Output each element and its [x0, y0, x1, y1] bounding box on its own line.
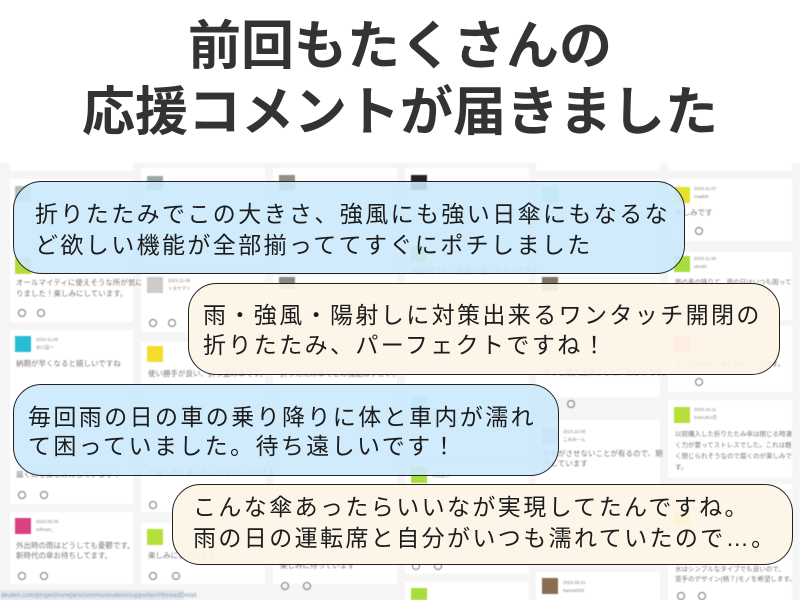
- column 5 comment cards: 雨傘がさせないことが有るので、期: [543, 448, 663, 458]
- column 2 comment cards: で届くのを楽しみにお待ちしています。: [148, 467, 282, 477]
- column 1 comment cards: 2023.11.05: [36, 337, 59, 342]
- column 1 comment cards: 届くのを楽しみにしています！: [16, 469, 121, 479]
- column 1 comment cards: [10, 160, 151, 584]
- column 5 comment cards: [536, 160, 670, 600]
- column 1 comment cards: mifreen_: [36, 527, 54, 532]
- column 2 comment cards: 2023.11.08: [168, 278, 191, 283]
- speech bubble: cream comment 4: こんな傘あったらいいなが実現してたんですね。: [193, 494, 750, 520]
- column 4 comment cards: [405, 168, 539, 600]
- column 1 comment cards: 新時代の傘お待ちしてます。: [16, 550, 112, 560]
- title: [82, 17, 718, 142]
- column 6 comment cards: く力が要ってストレスでした。これは軽: [675, 440, 792, 449]
- column 2 comment cards: 使い勝手が良い、折り畳み傘です。: [148, 368, 267, 378]
- column 6 comment cards: 2023.10.11: [694, 407, 717, 412]
- column 5 comment cards: やっと購入出来ました、楽しみです。: [543, 367, 670, 377]
- column 1 comment cards: 水川菜〜: [36, 344, 54, 351]
- column 6 comment cards: 水はシンプルなタイプでも良いので、: [675, 564, 785, 573]
- comment wall background: [0, 160, 800, 600]
- column 6 comment cards: 楽しみです: [675, 207, 712, 217]
- title: 前回もたくさんの: [188, 17, 612, 76]
- column 5 comment cards: 2023.10.08: [563, 429, 586, 434]
- browser status bar url: akuten.com/project/runejars/communication/supporter/#threadDetail: [1, 592, 197, 599]
- column 6 comment cards: す。: [675, 463, 687, 471]
- speech bubble: blue comment 3: [14, 384, 558, 476]
- column 1 comment cards: 外出時の雨はどうしても憂鬱です。: [16, 540, 135, 550]
- column 5 comment cards: 待しています: [543, 458, 588, 468]
- column 1 comment cards: 2023.06.05: [36, 519, 59, 524]
- column 6 comment cards: く閉じられそうなので届くのが楽しみで: [675, 451, 792, 460]
- column 6 comment cards: maable: [694, 194, 709, 199]
- column 6 comment cards: 2023.11.07: [694, 186, 717, 191]
- column 2 comment cards: [141, 168, 282, 584]
- column 1 comment cards: 納期が早くなると嬉しいですね: [16, 358, 121, 368]
- speech bubble: blue comment 1: ど欲しい機能が全部揃っててすぐにポチしました: [35, 232, 593, 258]
- column 5 comment cards: 2023.09.21: [563, 580, 586, 585]
- column 6 comment cards: skoshi: [694, 264, 707, 269]
- speech bubble: cream comment 2: 折りたたみ、パーフェクトですね！: [203, 332, 608, 358]
- browser status bar url: [0, 590, 197, 600]
- column 6 comment cards: 雨の奥の降りて、雨の日はいつも困って: [675, 277, 791, 286]
- column 6 comment cards: 以前購入した折りたたみ傘は閉じる時凄: [675, 429, 792, 438]
- column 1 comment cards: りました！楽しみにしています。: [16, 288, 128, 298]
- column 6 comment cards: とても実用的！楽しみにしています。: [675, 359, 784, 368]
- column 4 comment cards: 水紀起き: [432, 472, 450, 479]
- column 4 comment cards: 雨の日でも、快適に過ごせそうです！: [412, 265, 539, 275]
- column 3 comment cards: [273, 168, 400, 590]
- title: 応援コメントが届きました: [82, 83, 718, 142]
- column 3 comment cards: 楽しみに待っています: [280, 560, 355, 570]
- column 5 comment cards: こみみーん: [563, 437, 586, 443]
- speech bubble: blue comment 3: 毎回雨の日の車の乗り降りに体と車内が濡れ: [28, 404, 536, 430]
- column 6 comment cards: 2023.11.06: [694, 256, 717, 261]
- column 6 comment cards: SAKURA花: [694, 414, 718, 421]
- speech bubble: cream comment 4: 雨の日の運転席と自分がいつも濡れていたので…。: [193, 525, 777, 551]
- column 2 comment cards: 楽しみにしています。: [148, 550, 222, 560]
- speech bubble: cream comment 2: [188, 284, 780, 374]
- column 5 comment cards: haina5555: [563, 588, 585, 593]
- column 1 comment cards: オールマイティに使えそうな所が気に入: [16, 277, 151, 287]
- column 2 comment cards: トヌヤマリ: [168, 286, 190, 292]
- speech bubble: blue comment 1: 折りたたみでこの大きさ、強風にも強い日傘にもなるな: [35, 201, 670, 227]
- speech bubble: cream comment 2: 雨・強風・陽射しに対策出来るワンタッチ開閉の: [203, 302, 762, 328]
- speech bubble: cream comment 4: [172, 484, 792, 564]
- column 3 comment cards: 折りたたみ傘でこの機能はすごい。: [280, 368, 400, 378]
- column 6 comment cards: [668, 160, 796, 600]
- speech bubble: blue comment 1: [14, 182, 684, 274]
- speech bubble: blue comment 3: て困っていました。待ち遠しいです！: [28, 433, 458, 459]
- column 6 comment cards: 苦手のデザイン(柄？)モノを希望します。: [675, 574, 796, 583]
